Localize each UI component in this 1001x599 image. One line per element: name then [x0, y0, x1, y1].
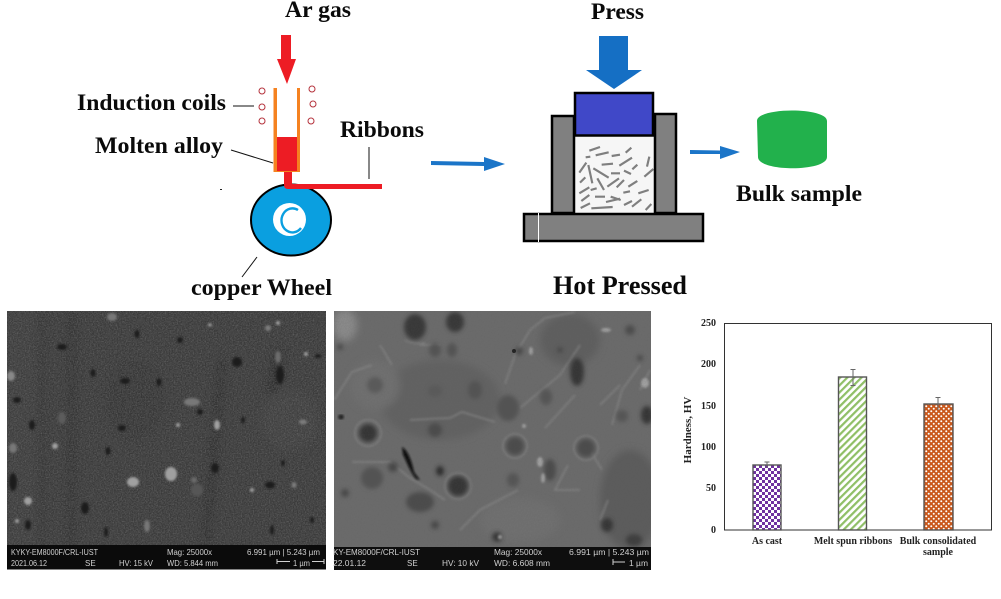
arrow: press force [586, 36, 642, 89]
SEM metadata text: Mag: 25000x [167, 548, 212, 557]
arrow: to bulk sample [690, 146, 740, 159]
y axis tick labels [701, 318, 716, 536]
SEM metadata text: 6.991 µm | 5.243 µm [569, 548, 649, 557]
base plate [524, 214, 703, 241]
arrow: to hot press [431, 157, 505, 171]
left die wall [552, 116, 574, 213]
label: copper Wheel: copper Wheel [191, 275, 332, 300]
SEM metadata text: WD: 5.844 mm [167, 559, 218, 568]
leader: molten alloy [231, 150, 273, 163]
SEM metadata text: HV: 15 kV [119, 559, 154, 568]
die chamber [575, 135, 654, 214]
bar: Bulk consolidated sample [924, 404, 953, 530]
y axis tick labels: 150 [701, 401, 716, 412]
SEM metadata text: HV: 10 kV [442, 559, 480, 568]
SEM metadata text [333, 548, 649, 568]
SEM metadata text: 22.01.12 [333, 559, 367, 568]
base seam [538, 213, 540, 242]
panel: melt spinning diagram [77, 0, 424, 300]
category labels: Bulk consolidated [900, 536, 977, 547]
label: Ribbons: Ribbons [340, 117, 424, 142]
icon: copper wheel [251, 184, 331, 256]
label: Hot Pressed: Hot Pressed [553, 271, 688, 300]
bar chart: hardness [682, 318, 992, 558]
SEM metadata text: 1 µm [629, 559, 648, 568]
bar: As cast [753, 465, 781, 530]
punch [575, 93, 653, 136]
label: Bulk sample: Bulk sample [736, 181, 862, 206]
label: Induction coils: Induction coils [77, 90, 226, 115]
y axis tick labels: 100 [701, 442, 716, 453]
SEM surface texture [7, 311, 326, 545]
melt stream and ribbon [284, 172, 382, 189]
crucible tube [274, 88, 300, 174]
y axis tick labels: 50 [706, 483, 716, 494]
molten alloy in crucible [277, 137, 297, 171]
leader: induction coils [233, 105, 254, 107]
category labels: Melt spun ribbons [814, 536, 892, 547]
arrow: argon gas flow [277, 35, 296, 84]
ribbons in die [579, 147, 653, 210]
icon: induction coil rings [259, 86, 316, 124]
leader: ribbons [368, 147, 370, 179]
SEM metadata text: Mag: 25000x [494, 548, 542, 557]
SEM info bar [7, 545, 326, 570]
y axis tick labels: 200 [701, 359, 716, 370]
y axis tick labels: 250 [701, 318, 716, 329]
SEM metadata text: SE [85, 559, 96, 568]
SEM metadata text: KY-EM8000F/CRL-IUST [333, 548, 420, 557]
plot frame [724, 324, 992, 530]
panel: SEM micrograph consolidated [333, 309, 660, 570]
label: Molten alloy: Molten alloy [95, 133, 224, 158]
y axis tick labels: 0 [711, 525, 716, 536]
category labels [752, 536, 977, 558]
SEM metadata text: SE [407, 559, 418, 568]
SEM metadata text: 6.991 µm | 5.243 µm [247, 548, 320, 557]
SEM metadata text: KYKY-EM8000F/CRL-IUST [11, 548, 98, 557]
panel: SEM micrograph as cast [7, 311, 326, 570]
leader: copper wheel [242, 257, 257, 277]
category labels: sample [923, 547, 954, 558]
icon: bulk sample cylinder [757, 110, 827, 168]
SEM info bar [334, 547, 651, 570]
y axis title: Hardness, HV [682, 397, 694, 463]
SEM metadata text: 1 µm [293, 559, 310, 568]
panel: hot press diagram [524, 0, 703, 300]
error bars [764, 370, 940, 468]
SEM surface texture [333, 309, 660, 550]
SEM metadata text: WD: 6.608 mm [494, 559, 550, 568]
stray dot [220, 189, 222, 190]
category labels: As cast [752, 536, 783, 547]
SEM metadata text: 2021.06.12 [11, 559, 47, 568]
SEM metadata text [11, 548, 324, 568]
bar: Melt spun ribbons [838, 377, 866, 530]
right die wall [655, 114, 676, 213]
